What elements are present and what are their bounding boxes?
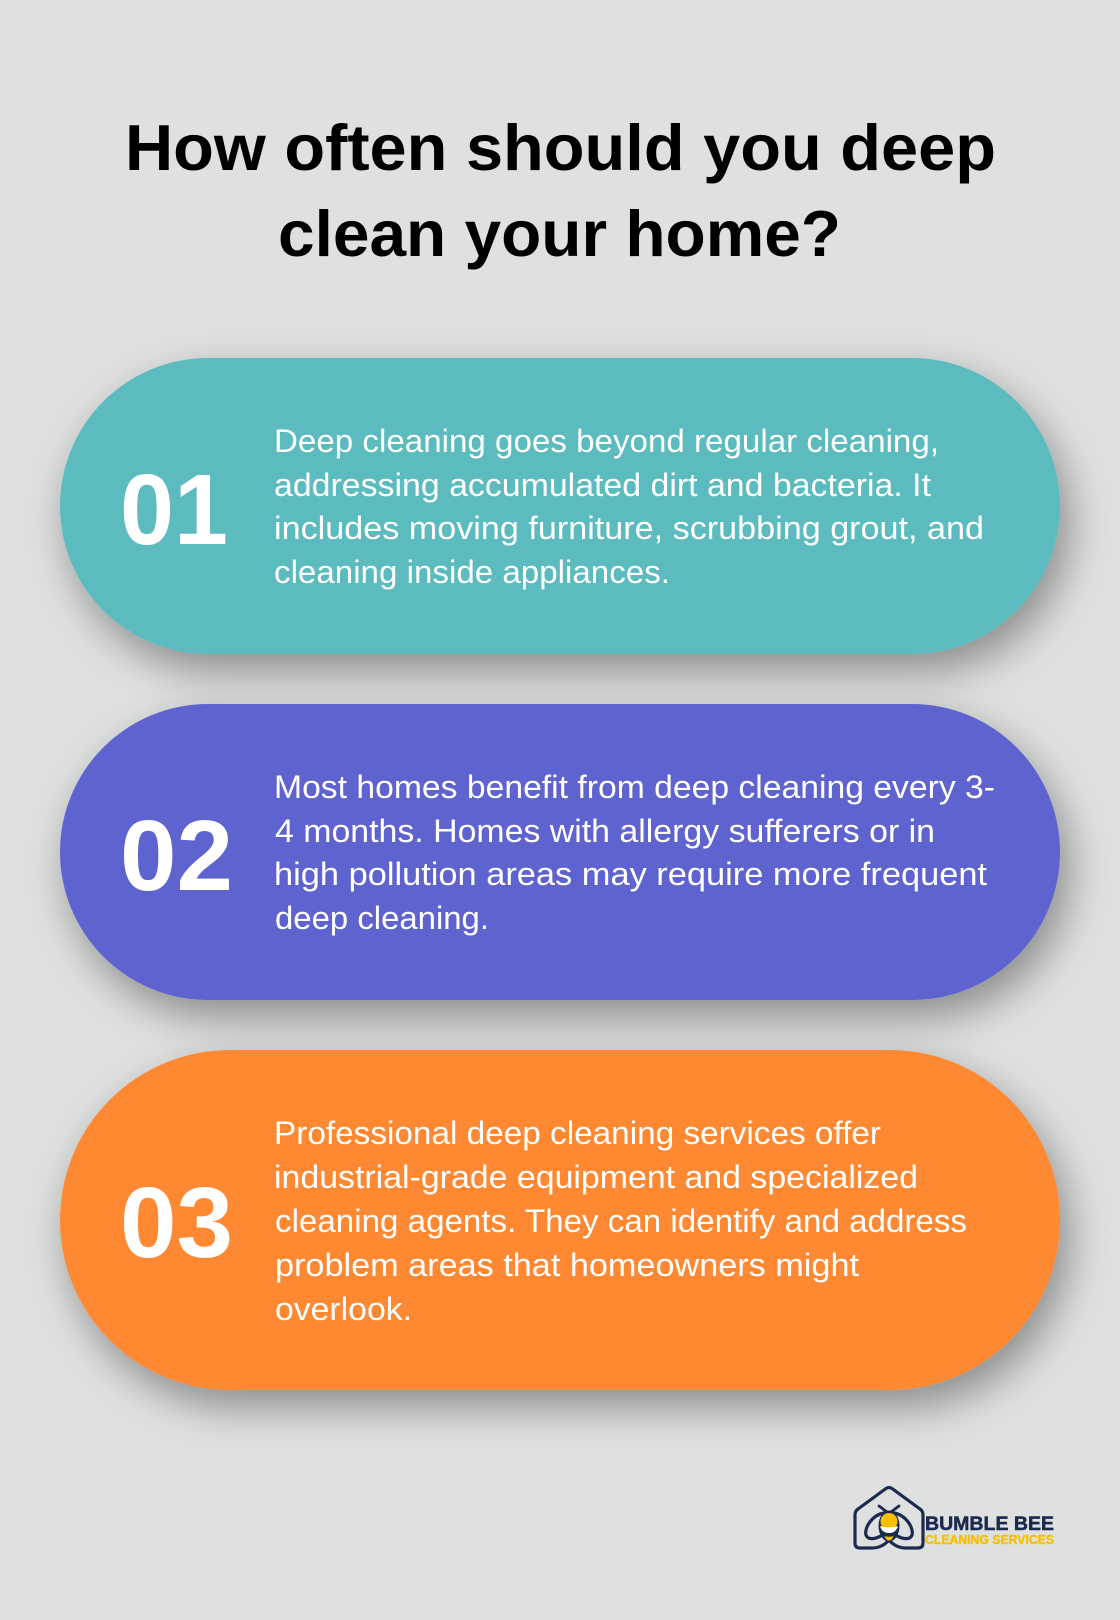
number 03: 03: [120, 1167, 233, 1279]
text block 02: Most homes benefit from deep cleaning every 3-: [274, 769, 995, 805]
title: [125, 111, 996, 270]
logo: Bumble Bee Cleaning Services: [855, 1488, 1054, 1548]
number 02: 02: [120, 800, 233, 912]
panel: step 02: [60, 704, 1060, 1000]
text block 03: problem areas that homeowners might: [275, 1247, 859, 1283]
text block 02: deep cleaning.: [275, 900, 489, 936]
pill background 01: [60, 358, 1060, 654]
title: How often should you deep: [125, 111, 996, 184]
text block 03: industrial-grade equipment and specialized: [274, 1159, 918, 1195]
pill background 02: [60, 704, 1060, 1000]
text block 01: Deep cleaning goes beyond regular cleaning,: [274, 423, 939, 459]
text block 03: overlook.: [275, 1291, 412, 1327]
text block 02: high pollution areas may require more frequent: [274, 856, 987, 892]
number 01: 01: [120, 454, 228, 566]
text block 02: [274, 769, 995, 936]
text block 03: [274, 1115, 967, 1327]
text block 03: cleaning agents. They can identify and address: [275, 1203, 967, 1239]
title: clean your home?: [278, 197, 841, 270]
panel: step 03: [60, 1050, 1060, 1390]
logo text: BUMBLE BEE: [925, 1514, 1054, 1535]
text block 01: [274, 423, 984, 590]
text block 01: cleaning inside appliances.: [274, 554, 670, 590]
pill background 03: [60, 1050, 1060, 1390]
text block 01: addressing accumulated dirt and bacteria. It: [274, 467, 931, 503]
text block 03: Professional deep cleaning services offer: [274, 1115, 881, 1151]
text block 02: 4 months. Homes with allergy sufferers or in: [275, 813, 935, 849]
panel: step 01: [60, 358, 1060, 654]
logo text: CLEANING SERVICES: [925, 1533, 1054, 1547]
text block 01: includes moving furniture, scrubbing grout, and: [274, 510, 984, 546]
logo text: [925, 1514, 1054, 1547]
icon: house with bee: [855, 1488, 923, 1548]
